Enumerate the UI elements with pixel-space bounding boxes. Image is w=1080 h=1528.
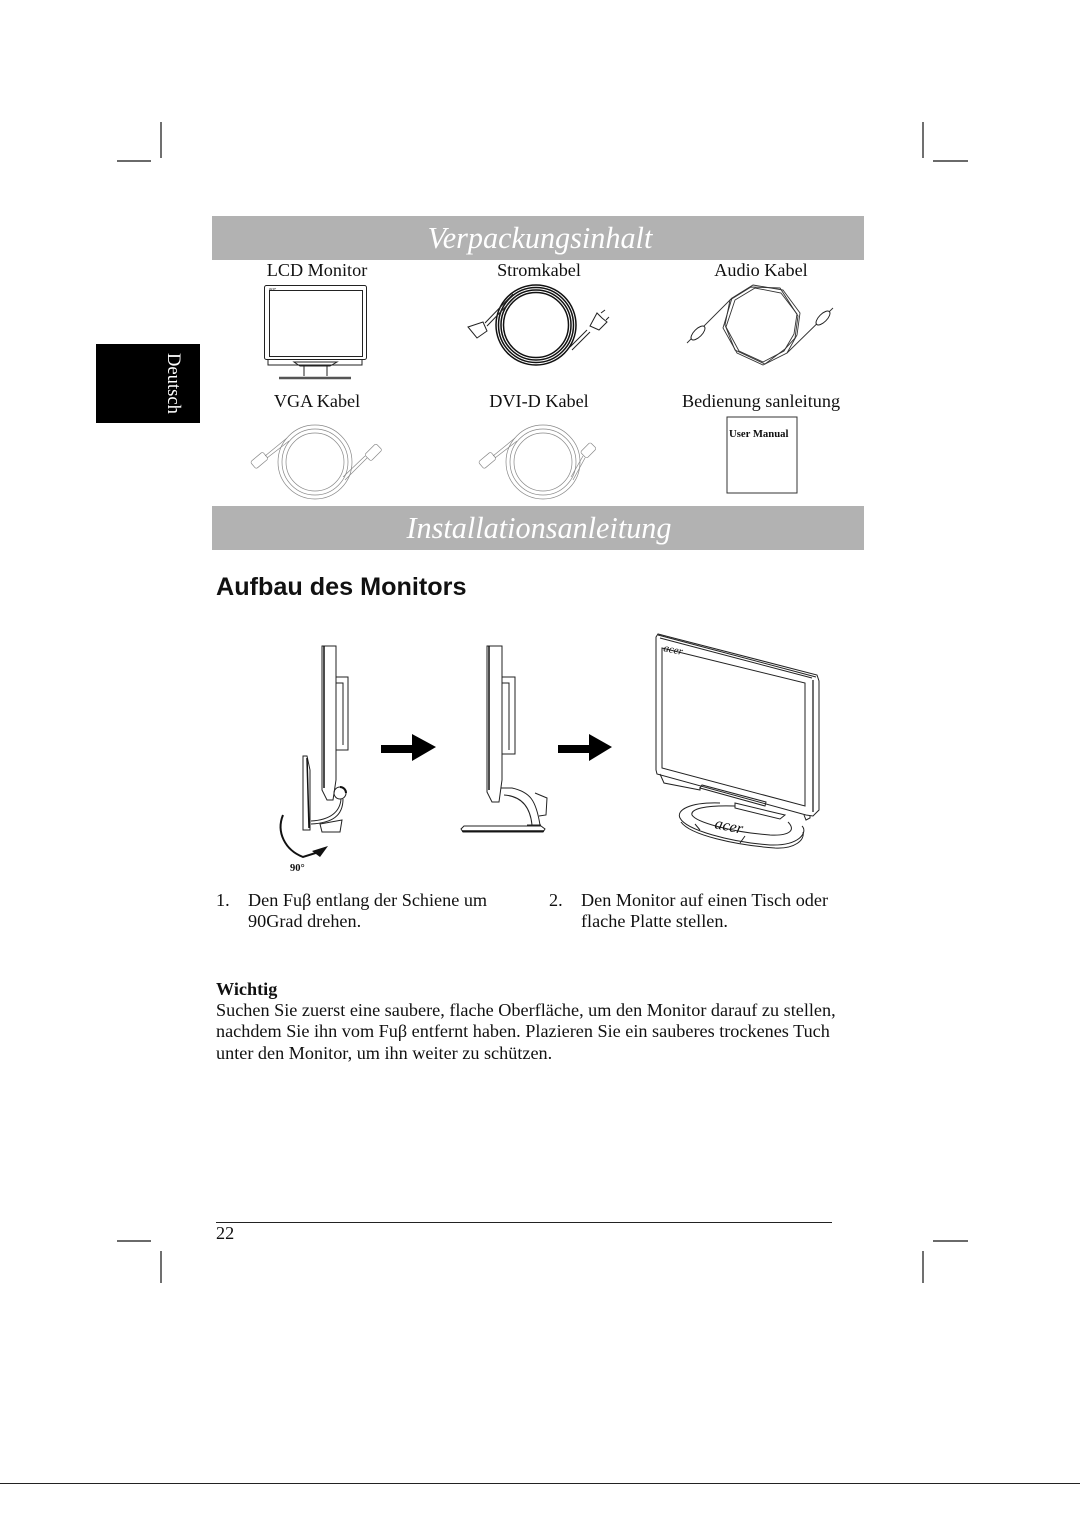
item: Stromkabel: Stromkabel bbox=[497, 260, 581, 280]
step 1 text: 90Grad drehen. bbox=[248, 911, 361, 931]
arrow 1 bbox=[381, 734, 436, 761]
language tab bbox=[96, 344, 200, 423]
step 2 text bbox=[549, 890, 828, 931]
note heading: Wichtig bbox=[216, 979, 277, 999]
note text: Suchen Sie zuerst eine saubere, flache Oberfläche, um den Monitor darauf zu stellen, bbox=[216, 1000, 836, 1020]
heading banner: Installationsanleitung bbox=[212, 506, 864, 550]
step 2 text: Den Monitor auf einen Tisch oder bbox=[581, 890, 828, 910]
item: DVI-D Kabel bbox=[478, 391, 596, 499]
step 2 text: 2. bbox=[549, 890, 563, 910]
item: LCD Monitor: acer bbox=[269, 286, 277, 291]
crop marks bbox=[117, 122, 968, 1283]
item: Bedienungsanleitung: Bedienung sanleitung bbox=[682, 391, 840, 411]
note text: nachdem Sie ihn vom Fuβ entfernt haben. Plazieren Sie ein sauberes trockenes Tuch bbox=[216, 1021, 830, 1041]
item: VGA Kabel bbox=[250, 391, 382, 499]
note text bbox=[216, 1000, 836, 1063]
heading banner: Verpackungsinhalt: Verpackungsinhalt bbox=[428, 221, 653, 255]
item: LCD Monitor: LCD Monitor bbox=[267, 260, 367, 280]
item: Bedienungsanleitung bbox=[682, 391, 840, 493]
note text: unter den Monitor, um ihn weiter zu schützen. bbox=[216, 1043, 552, 1063]
item: Audio Kabel bbox=[687, 260, 833, 365]
item: DVI-D Kabel: DVI-D Kabel bbox=[489, 391, 589, 411]
heading banner: Installationsanleitung: Installationsanleitung bbox=[406, 511, 671, 545]
step 1 text: Den Fuβ entlang der Schiene um bbox=[248, 890, 487, 910]
subheading: Aufbau des Monitors bbox=[216, 573, 466, 601]
footer rule bbox=[216, 1222, 832, 1224]
language tab: Deutsch bbox=[163, 353, 184, 415]
heading banner: Verpackungsinhalt bbox=[212, 216, 864, 260]
diagram: monitor front view bbox=[656, 634, 819, 848]
item: LCD Monitor bbox=[264, 260, 367, 378]
diagram: monitor side view standing bbox=[461, 646, 547, 832]
item: Audio Kabel: Audio Kabel bbox=[714, 260, 808, 280]
page number: 22 bbox=[216, 1223, 234, 1243]
step 1 text: 1. bbox=[216, 890, 230, 910]
step 1 text bbox=[216, 890, 487, 931]
item: VGA Kabel: VGA Kabel bbox=[274, 391, 360, 411]
step 2 text: flache Platte stellen. bbox=[581, 911, 728, 931]
arrow 2 bbox=[558, 734, 612, 761]
diagram: monitor side view with stand folded: 90° bbox=[290, 863, 305, 874]
item: Bedienungsanleitung: User Manual bbox=[729, 428, 789, 440]
bottom rule bbox=[0, 1482, 1080, 1484]
diagram: monitor front view: acer bbox=[662, 642, 685, 658]
item: Stromkabel bbox=[468, 260, 609, 365]
diagram: monitor front view: acer bbox=[713, 815, 745, 838]
diagram: monitor side view with stand folded bbox=[281, 646, 348, 874]
